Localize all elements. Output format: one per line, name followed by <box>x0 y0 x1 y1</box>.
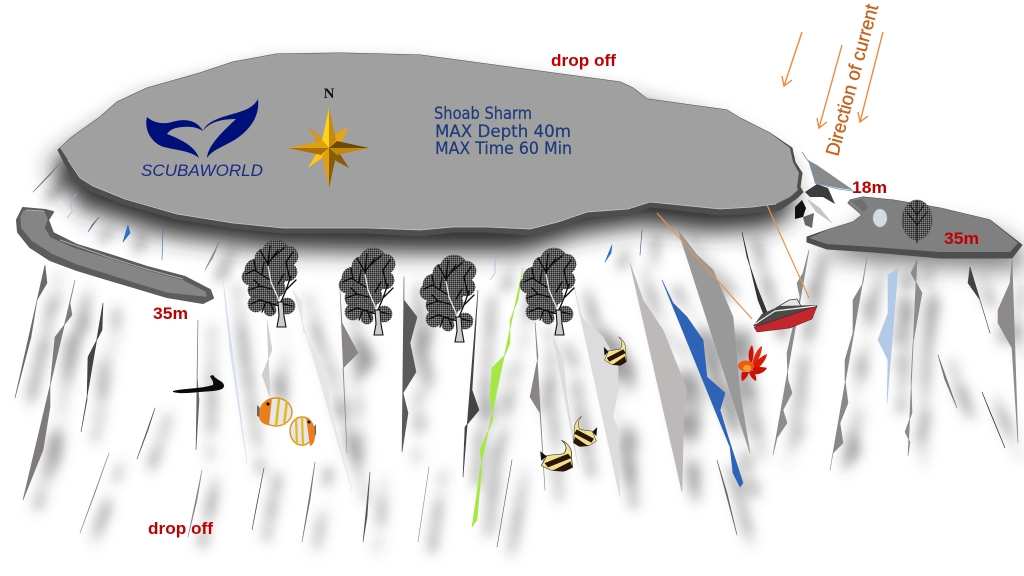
compass north label: N <box>324 86 335 102</box>
drop off label bottom: drop off <box>148 519 213 538</box>
depth label 35m right: 35m <box>944 229 979 248</box>
scubaworld logo <box>141 99 263 180</box>
arrow: current 1 <box>782 32 802 86</box>
icon: bannerfish B <box>573 416 597 447</box>
reef wall shadows <box>15 163 1018 547</box>
left reef sliver <box>17 208 213 303</box>
arrow: current 2 <box>817 45 842 128</box>
icon: compass star <box>288 108 369 188</box>
sea fan 4 <box>520 248 576 335</box>
sea fan 1 <box>242 240 298 327</box>
pale rock <box>873 209 887 227</box>
direction of current label: Direction of current <box>823 2 883 158</box>
right reef cast shadow <box>813 217 1024 269</box>
site info text: MAX Time 60 Min <box>435 139 572 159</box>
sea fan 2 <box>339 248 395 335</box>
site info text: Shoab Sharm <box>434 104 532 124</box>
icon: bannerfish C <box>540 440 573 472</box>
scubaworld logo: SCUBAWORLD <box>141 161 263 180</box>
depth label 35m left: 35m <box>153 304 188 323</box>
right reef <box>807 197 1022 258</box>
drop off label top: drop off <box>551 51 616 70</box>
icon: butterfly fish pair <box>257 398 316 446</box>
site info text: MAX Depth 40m <box>435 122 571 142</box>
site info text <box>434 104 572 159</box>
depth label 18m: 18m <box>852 178 887 197</box>
main reef cast shadow <box>50 71 795 252</box>
icon: boat <box>753 299 817 332</box>
icon: bannerfish A <box>604 337 626 366</box>
icon: red fish <box>738 345 767 381</box>
icon: moray eel <box>173 375 224 393</box>
reef wall cracks <box>15 163 1018 547</box>
sea fan 3 <box>420 255 476 342</box>
gap boulders <box>795 152 853 228</box>
small sea fan <box>902 200 932 243</box>
mooring lines <box>657 205 809 319</box>
arrow: current 3 <box>858 32 883 122</box>
main shoab reef <box>58 53 803 236</box>
